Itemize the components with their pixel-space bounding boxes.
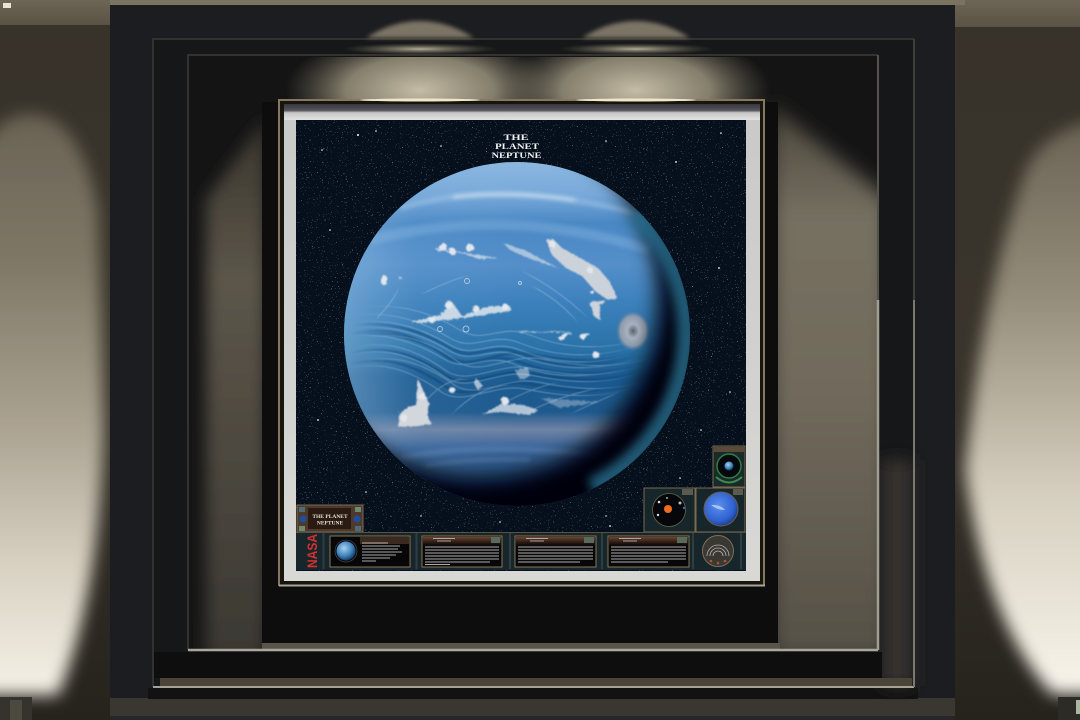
top light band	[291, 57, 542, 99]
title plate: NEPTUNE	[317, 520, 343, 526]
poster frame	[278, 98, 765, 586]
lower central cloud	[501, 397, 509, 405]
white cloud formations	[380, 239, 617, 427]
central cloud band	[445, 301, 453, 309]
atmospheric bands	[370, 194, 650, 466]
planet Neptune	[340, 162, 734, 550]
swirling currents: dark	[350, 324, 640, 392]
terminator shadow	[364, 176, 690, 506]
swirling currents: light	[362, 272, 635, 416]
NASA worm logo: NASA	[304, 534, 320, 568]
title: PLANET	[495, 142, 540, 151]
hook cloud	[590, 300, 606, 320]
ceiling lamp glow: right	[558, 21, 714, 55]
inner lit panel	[188, 30, 890, 660]
lit crescent rim	[592, 212, 687, 488]
wall lamp fixtures	[0, 697, 1080, 720]
ring-shaped storms	[438, 278, 522, 332]
title plate: THE PLANET	[312, 514, 348, 520]
title: NEPTUNE	[492, 151, 542, 160]
ceiling lamp glow: left	[342, 21, 498, 55]
solar system diagram panel	[644, 488, 695, 532]
large upper-right cloud	[546, 239, 617, 300]
title plate	[297, 505, 363, 532]
bottom sill	[262, 643, 780, 649]
planet base sphere	[340, 160, 695, 510]
small right clouds	[558, 333, 572, 341]
lower-left cloud	[398, 379, 432, 427]
bottom information strip	[296, 532, 746, 570]
white mat	[284, 104, 760, 581]
round mission seal	[702, 536, 734, 566]
upper cloud row	[439, 243, 447, 251]
top-right badge: mission emblem	[713, 446, 745, 487]
blue Neptune panel	[696, 488, 745, 532]
info card 4	[608, 536, 689, 567]
info card 1	[330, 536, 410, 567]
left light wash	[206, 118, 266, 660]
dark frame surround	[110, 0, 965, 720]
framed poster	[278, 98, 765, 586]
info card 2	[422, 536, 502, 567]
info card 3	[515, 536, 596, 567]
wall spotlight: right	[965, 119, 1080, 694]
storm vortex	[616, 311, 650, 351]
title: THE	[504, 133, 528, 142]
title	[492, 133, 542, 160]
poster drop shadow	[262, 102, 778, 643]
wall spotlight: left	[0, 114, 104, 695]
starfield artwork	[296, 120, 746, 571]
right light wash	[778, 103, 877, 649]
left small cloud	[380, 275, 388, 285]
